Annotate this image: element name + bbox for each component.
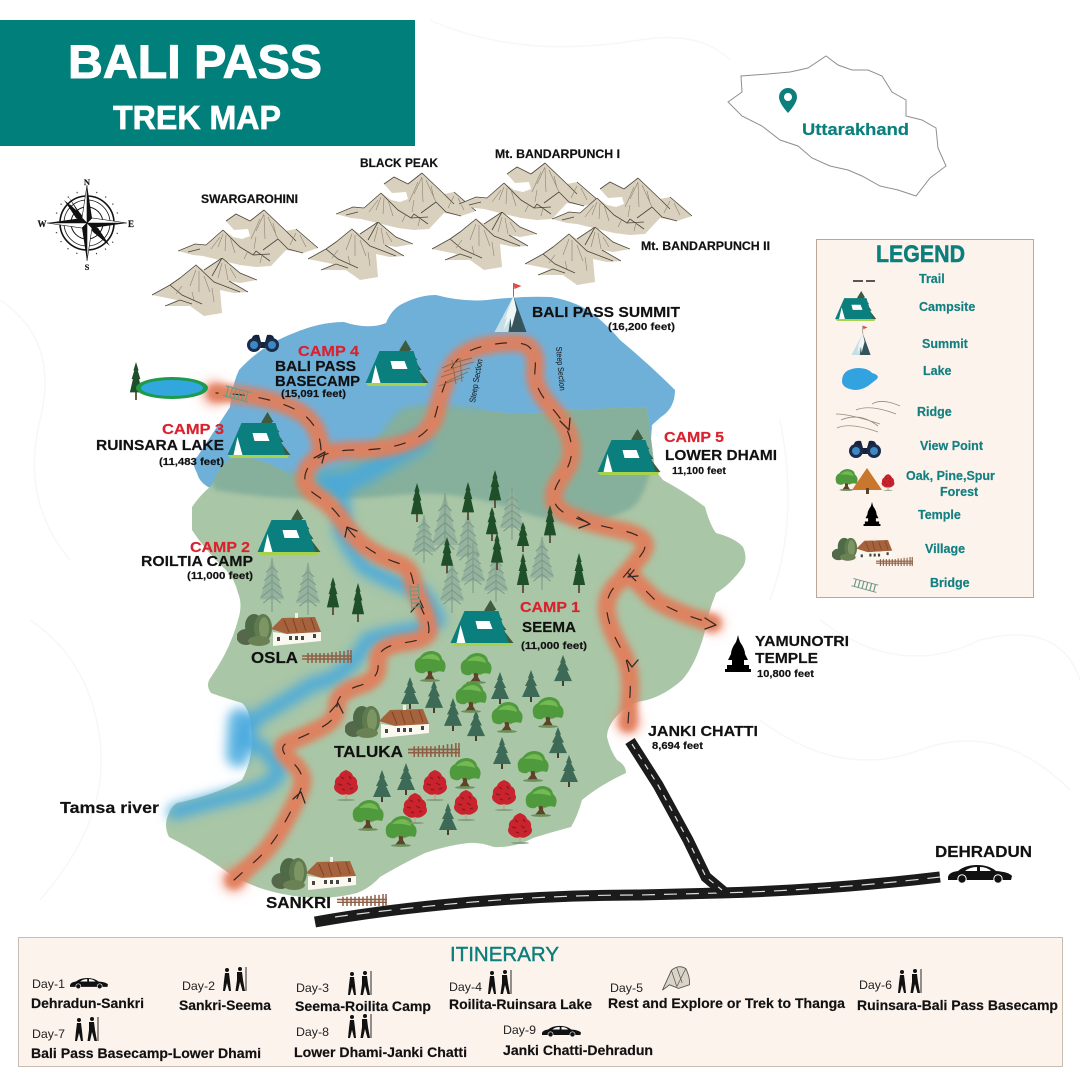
day 1: Day-1 <box>32 977 65 991</box>
village: Sankri <box>266 857 387 912</box>
ridge hatching near summit <box>439 358 474 386</box>
village: Osla <box>236 613 352 667</box>
Dehradun label with car: DEHRADUN <box>935 844 1032 861</box>
day 5 <box>608 967 845 1011</box>
camp 2: Roiltia Camp: CAMP 2 <box>190 539 250 556</box>
title banner: BALI PASS <box>68 35 322 88</box>
legend: lake <box>842 364 952 390</box>
day 9 <box>503 1023 653 1058</box>
legend: ridge: Ridge <box>917 405 952 419</box>
trail: glowing route <box>202 343 723 892</box>
camp 5: Lower Dhami: LOWER DHAMI <box>665 447 777 464</box>
icon: compass rose: N <box>84 177 91 187</box>
mountains: Swargarohini range <box>152 210 318 316</box>
day 7: Day-7 <box>32 1027 65 1041</box>
day 3: Day-3 <box>296 981 329 995</box>
panel: itinerary <box>18 938 1062 1066</box>
legend: trail <box>853 272 945 286</box>
mountain labels: SWARGAROHINI <box>201 194 298 206</box>
river: Tamsa <box>175 440 437 812</box>
locator map: Uttarakhand: Uttarakhand <box>802 121 909 139</box>
Dehradun label with car <box>935 844 1032 883</box>
camp 3: Ruinsara Lake: (11,483 feet) <box>159 456 224 468</box>
day 7: Bali Pass Basecamp-Lower Dhami <box>31 1045 261 1061</box>
day 8 <box>294 1014 467 1060</box>
summit: Bali Pass: (16,200 feet) <box>608 321 675 333</box>
Yamunotri temple: 10,800 feet <box>757 668 815 680</box>
day 9: Janki Chatti-Dehradun <box>503 1042 653 1058</box>
alpine zone: blue region <box>194 295 675 523</box>
day 4: Roilita-Ruinsara Lake <box>449 996 592 1012</box>
day 6 <box>857 969 1058 1013</box>
legend: campsite: Campsite <box>919 300 975 314</box>
panel: legend: LEGEND <box>876 241 965 268</box>
camp 2: Roiltia Camp <box>141 509 320 582</box>
camp 1: Seema: CAMP 1 <box>520 599 580 616</box>
forest: upper pines <box>260 470 585 622</box>
overlap of alpine zone and land <box>212 406 654 522</box>
trail end glows <box>202 381 723 892</box>
steep section labels: Steep Section <box>554 346 568 391</box>
Tamsa river label: Tamsa river <box>60 800 159 817</box>
camp 4: Bali Pass Basecamp: BALI PASS <box>275 358 356 375</box>
day 2: Day-2 <box>182 979 215 993</box>
day 4 <box>449 970 592 1012</box>
day 4: Day-4 <box>449 980 482 994</box>
legend: summit <box>851 326 969 355</box>
road: Dehradun to Sankri <box>315 877 940 922</box>
camp 1: Seema: SEEMA <box>522 619 576 636</box>
camp 1: Seema: (11,000 feet) <box>521 640 587 652</box>
legend: village: Village <box>925 542 965 556</box>
panel: legend <box>816 240 1034 598</box>
village: Taluka: TALUKA <box>334 744 403 761</box>
mountain labels: Mt. BANDARPUNCH I <box>495 149 620 161</box>
mountains: Black Peak range <box>308 173 476 280</box>
title banner: TREK MAP <box>113 99 281 136</box>
steep section labels <box>467 346 568 403</box>
day 3 <box>295 971 431 1014</box>
Yamunotri temple: YAMUNOTRI <box>755 633 849 650</box>
day 5: Day-5 <box>610 981 643 995</box>
mountains: Mt. Bandarpunch II range <box>525 178 692 285</box>
day 6: Day-6 <box>859 978 892 992</box>
Janki Chatti label: 8,694 feet <box>652 740 704 752</box>
bridges <box>223 386 420 610</box>
legend: view point: View Point <box>920 439 984 453</box>
legend: lake: Lake <box>923 364 952 378</box>
camp 4: Bali Pass Basecamp <box>275 340 428 400</box>
day 2 <box>179 967 271 1013</box>
legend: bridge <box>851 576 970 592</box>
camp 3: Ruinsara Lake: RUINSARA LAKE <box>96 437 224 454</box>
icon: view point binoculars <box>247 335 279 352</box>
village: Taluka <box>334 705 460 761</box>
land: green terrain <box>166 406 746 898</box>
camp 2: Roiltia Camp: ROILTIA CAMP <box>141 553 253 570</box>
legend: campsite <box>835 291 975 321</box>
camp 5: Lower Dhami: 11,100 feet <box>672 465 726 477</box>
steep section labels: Steep Section <box>467 358 485 403</box>
soft edge between alpine zone and land <box>285 406 482 475</box>
Janki Chatti label <box>648 723 758 752</box>
camp 4: Bali Pass Basecamp: CAMP 4 <box>298 343 360 360</box>
camp 5: Lower Dhami <box>598 429 777 477</box>
camp 1: Seema <box>450 599 587 652</box>
village: Osla: OSLA <box>251 650 298 667</box>
locator map: Uttarakhand <box>728 56 946 196</box>
lake: Ruinsara with pine <box>130 362 208 400</box>
legend: summit: Summit <box>922 337 969 351</box>
day 1: Dehradun-Sankri <box>31 995 144 1011</box>
day 5: Rest and Explore or Trek to Thanga <box>608 995 845 1011</box>
legend: village <box>832 537 965 566</box>
road: to Janki Chatti <box>630 741 725 893</box>
icon: compass rose: S <box>85 262 90 272</box>
camp 5: Lower Dhami: CAMP 5 <box>664 429 724 446</box>
summit: Bali Pass: BALI PASS SUMMIT <box>532 304 680 321</box>
summit: Bali Pass <box>494 283 680 333</box>
day 6: Ruinsara-Bali Pass Basecamp <box>857 997 1058 1013</box>
day 9: Day-9 <box>503 1023 536 1037</box>
day 1 <box>31 977 144 1011</box>
icon: compass rose <box>38 177 134 272</box>
day 8: Lower Dhami-Janki Chatti <box>294 1044 467 1060</box>
forest: lower oak, spruce and rhododendron <box>334 651 578 847</box>
Janki Chatti label: JANKI CHATTI <box>648 723 758 740</box>
legend: trail: Trail <box>919 272 945 286</box>
camp 4: Bali Pass Basecamp: (15,091 feet) <box>281 388 346 400</box>
legend: view point <box>849 439 984 458</box>
icon: compass rose: W <box>38 219 46 229</box>
legend: forest: Oak, Pine,Spur <box>906 469 995 483</box>
legend: bridge: Bridge <box>930 576 970 590</box>
legend: forest: Forest <box>940 485 979 499</box>
day 3: Seema-Roilita Camp <box>295 998 431 1014</box>
day 8: Day-8 <box>296 1025 329 1039</box>
title banner <box>0 20 415 146</box>
legend: forest <box>836 468 995 499</box>
Yamunotri temple <box>725 633 849 680</box>
camp 2: Roiltia Camp: (11,000 feet) <box>187 570 253 582</box>
camp 3: Ruinsara Lake <box>96 412 290 468</box>
legend: temple: Temple <box>918 508 961 522</box>
legend: ridge <box>836 401 952 432</box>
mountain labels <box>201 149 770 253</box>
camp 4: Bali Pass Basecamp: BASECAMP <box>275 373 360 390</box>
icon: location pin <box>779 88 797 113</box>
mountains: Mt. Bandarpunch I range <box>432 163 599 270</box>
legend: temple <box>864 502 961 526</box>
mountain labels: BLACK PEAK <box>360 158 439 170</box>
panel: itinerary: ITINERARY <box>450 944 559 966</box>
village: Sankri: SANKRI <box>266 895 331 912</box>
camp 3: Ruinsara Lake: CAMP 3 <box>162 421 224 438</box>
icon: compass rose: E <box>128 219 134 229</box>
day 7 <box>31 1017 261 1061</box>
mountain labels: Mt. BANDARPUNCH II <box>641 241 770 253</box>
Yamunotri temple: TEMPLE <box>755 650 818 667</box>
day 2: Sankri-Seema <box>179 997 271 1013</box>
